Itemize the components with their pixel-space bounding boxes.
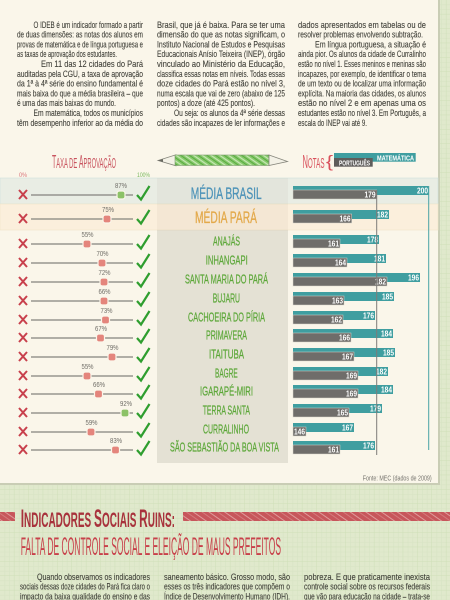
row: primavera [19, 326, 393, 343]
row: santa maria do pará: 196 [408, 272, 419, 282]
row: são sebastião da boa vista [19, 438, 375, 455]
section title: INDICADORES SOCIAIS RUINS: [21, 505, 175, 533]
lower text column 2 [164, 571, 290, 600]
intro text column 2: Instituto Nacional de Estudos e Pesquisas [157, 38, 285, 49]
intro text column 1: é uma das mais baixas do mundo. [17, 97, 116, 108]
row: igarapé-miri: IGARAPÉ-MIRI [200, 384, 253, 399]
row: média pará: 166 [340, 214, 351, 224]
row: bagre [19, 364, 388, 381]
row: primavera: 67% [95, 326, 107, 333]
row: média pará: 182 [377, 210, 388, 220]
row: bagre: 169 [346, 370, 357, 380]
row: são sebastião da boa vista: 83% [110, 438, 122, 445]
row: são sebastião da boa vista: 161 [328, 444, 339, 454]
row: média brasil [19, 183, 429, 203]
row: inhangapi: 181 [374, 254, 385, 264]
intro text column 3: estão no nível 2 e em apenas uma os [298, 97, 426, 108]
row: média brasil: MÉDIA BRASIL [191, 184, 262, 203]
row: bagre: 55% [82, 364, 94, 371]
row: terra santa: 92% [120, 401, 132, 408]
row: curralinho [19, 420, 354, 437]
row: bujaru [19, 289, 394, 306]
row: igarapé-miri: 184 [381, 384, 392, 394]
row: itaituba [19, 345, 395, 362]
reference line: média matemática [428, 186, 430, 450]
intro text column 3: escala do INEP vai até 9. [298, 117, 367, 128]
intro text column 1: provas de matemática e de língua portuguesa e [17, 38, 143, 49]
intro text column 2: Brasil, que já é baixa. Para se ter uma [157, 19, 286, 30]
row: cachoeira do piriá: CACHOEIRA DO PÍRIA [188, 310, 265, 325]
row: terra santa [19, 401, 382, 418]
row: anajás: 161 [328, 238, 339, 248]
lower text column 2: esses os três indicadores que compõem o [164, 581, 290, 592]
row: cachoeira do piriá: 176 [363, 310, 374, 320]
intro text column 2: classifica essas notas em níveis. Todas essas [157, 68, 285, 79]
row: inhangapi: INHANGAPI [206, 253, 248, 268]
intro text column 2: vinculado ao Ministério da Educação, [157, 58, 285, 69]
row: são sebastião da boa vista: 176 [363, 440, 374, 450]
row: curralinho: CURRALINHO [203, 422, 249, 437]
row: itaituba: 167 [342, 352, 353, 362]
intro text column 1: mais baixa do que a média brasileira – que [17, 87, 143, 98]
row: bujaru: 66% [98, 289, 110, 296]
row: cachoeira do piriá: 162 [331, 314, 342, 324]
row: média pará: MÉDIA PARÁ [195, 208, 257, 227]
row: inhangapi: 164 [335, 258, 346, 268]
row: média brasil: 179 [364, 190, 376, 200]
intro text column 2: dimensão do que as notas significam, o [157, 29, 285, 40]
intro text column 2: doze cidades do Pará estão no nível 3, [157, 78, 285, 89]
row: cachoeira do piriá [19, 308, 375, 325]
heading: notas with legend [302, 152, 416, 172]
intro text column 2: numa escala que vai de zero (abaixo de 125 [157, 87, 285, 98]
lower text column 1 [20, 571, 150, 600]
legend: matemática: MATEMÁTICA [377, 153, 414, 162]
intro text column 1 [17, 19, 144, 128]
reference line: média português [376, 190, 378, 455]
intro text column 1: Em 11 das 12 cidades do Pará [41, 58, 144, 69]
row: bujaru: BUJARU [213, 291, 240, 306]
intro text column 2: cidades são incapazes de ler informações e [157, 117, 285, 128]
row: bagre: BAGRE [215, 366, 238, 381]
legend brace: { [326, 152, 333, 171]
icon: pencil [158, 155, 288, 166]
lower text column 3 [304, 571, 431, 600]
row: igarapé-miri: 66% [93, 382, 105, 389]
row: são sebastião da boa vista: SÃO SEBASTIÃO DA BOA VISTA [170, 440, 279, 455]
row: primavera: 166 [339, 332, 350, 342]
row: média brasil: 87% [115, 183, 127, 190]
legend: português: PORTUGUÊS [339, 158, 370, 168]
row: média pará [19, 207, 389, 227]
row: anajás: 178 [367, 234, 378, 244]
row: cachoeira do piriá: 73% [100, 308, 112, 315]
row: primavera: PRIMAVERA [206, 328, 247, 343]
decorative hatched band left [0, 512, 15, 521]
paper panel [0, 0, 440, 485]
row: santa maria do pará: 72% [98, 270, 110, 277]
row: itaituba: 185 [383, 348, 394, 358]
intro text column 2: pontos) a doze (até 425 pontos). [157, 97, 255, 108]
row: terra santa: 165 [337, 408, 348, 418]
intro text column 2 [157, 19, 286, 128]
row: santa maria do pará: 182 [375, 276, 386, 286]
row: média pará: 75% [102, 207, 114, 214]
intro text column 1: têm desempenho inferior ao da média do [17, 117, 143, 128]
row: anajás [19, 232, 379, 249]
axis label 0%: 0% [19, 173, 28, 179]
row: igarapé-miri: 169 [346, 388, 357, 398]
row: santa maria do pará: SANTA MARIA DO PARÁ [185, 272, 268, 287]
row band: média brasil [0, 178, 438, 204]
city names panel: média rows tint [157, 178, 288, 230]
intro text column 2: Educacionais Anísio Teixeira (INEP), órgão [157, 48, 285, 59]
row: bujaru: 163 [332, 296, 343, 306]
lower text column 1: sociais dessas doze cidades do Pará fica claro o [20, 581, 150, 592]
intro text column 1: da 1ª à 4ª série do ensino fundamental é [17, 78, 143, 89]
row: primavera: 184 [381, 328, 392, 338]
intro text column 1: O IDEB é um indicador formado a partir [34, 19, 143, 30]
row: curralinho: 146 [294, 426, 305, 436]
intro text column 1: auditadas pela CGU, a taxa de aprovação [17, 68, 143, 79]
row: anajás: ANAJÁS [213, 234, 240, 249]
decorative hatched band right [183, 512, 450, 521]
row: igarapé-miri [19, 382, 393, 399]
intro text column 2: Ou seja: os alunos da 4ª série dessas [174, 107, 285, 118]
city names panel [157, 230, 288, 463]
row band: média pará [0, 204, 438, 230]
row: média brasil: 200 [417, 186, 428, 196]
row: itaituba: ITAITUBA [209, 347, 244, 362]
row: anajás: 55% [82, 232, 94, 239]
row: inhangapi [19, 251, 386, 268]
row: curralinho: 167 [342, 422, 353, 432]
lower text column 1: Quando observamos os indicadores [37, 571, 150, 582]
heading: notas with legend: NOTAS [302, 152, 324, 172]
lower text column 2: saneamento básico. Grosso modo, são [164, 571, 290, 582]
axis label 100%: 100% [137, 173, 151, 179]
row: bagre: 182 [376, 366, 387, 376]
row: terra santa: TERRA SANTA [203, 403, 250, 418]
row: bujaru: 185 [382, 292, 393, 302]
row: terra santa: 179 [370, 404, 381, 414]
row: inhangapi: 70% [96, 251, 108, 258]
row: curralinho: 59% [86, 420, 98, 427]
intro text column 3 [298, 19, 427, 128]
row: santa maria do pará [19, 270, 420, 287]
row: itaituba: 79% [106, 345, 118, 352]
heading: taxa de aprovação: TAXA DE APROVAÇÃO [52, 152, 116, 172]
intro text column 1: Em matemática, todos os municípios [34, 107, 143, 118]
intro text column 1: de duas dimensões: as notas dos alunos em [17, 29, 143, 40]
intro text column 1: as taxas de aprovação dos estudantes. [17, 48, 117, 59]
